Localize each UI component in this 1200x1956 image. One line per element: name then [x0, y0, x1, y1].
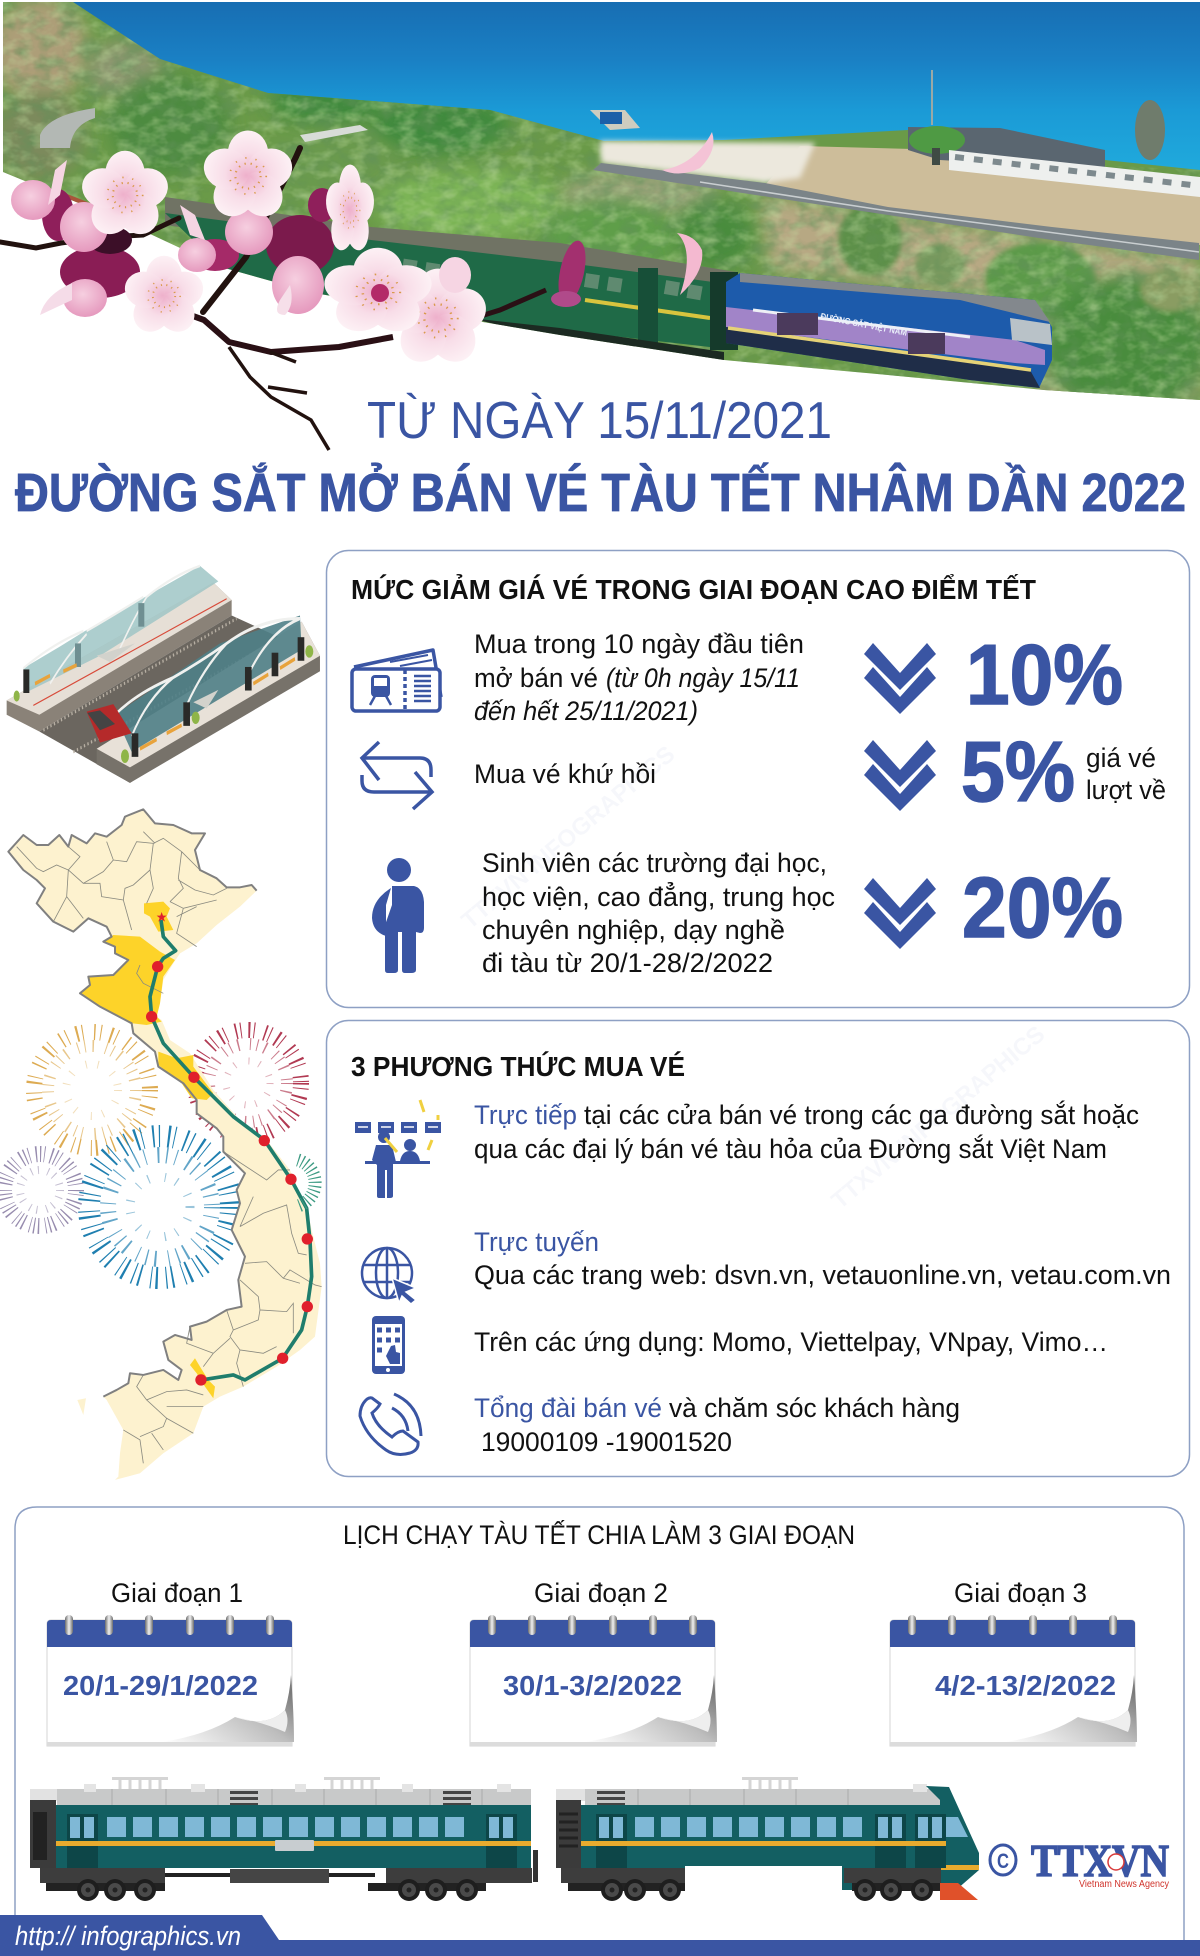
icon: smartphone: [372, 1316, 405, 1374]
heading: discount levels: MỨC GIẢM GIÁ VÉ TRONG GIAI ĐOẠN CAO ĐIỂM TẾT: [351, 573, 1036, 605]
heading: timetable: LỊCH CHẠY TÀU TẾT CHIA LÀM 3 GIAI ĐOẠN: [343, 1519, 855, 1550]
text: first ten days: Mua trong 10 ngày đầu tiên: [474, 629, 804, 659]
text: return fare: giá vé: [1086, 743, 1156, 773]
calendar: phase 2: 30/1-3/2/2022: [503, 1670, 682, 1701]
text: phase 3 label: Giai đoạn 3: [954, 1578, 1087, 1608]
text: buy in person: [474, 1099, 1139, 1164]
watermark: TTXVN INFOGRAPHICS: [827, 1021, 1050, 1215]
calendar: phase 1: 20/1-29/1/2022: [63, 1670, 258, 1701]
calendar: phase 3: 4/2-13/2/2022: [935, 1670, 1116, 1701]
icon: down chevrons 20 percent: [864, 878, 936, 949]
illustration: railway station: [7, 566, 320, 783]
text: students: đi tàu từ 20/1-28/2/2022: [482, 948, 773, 978]
text: buy in person: tại các cửa bán vé trong các ga đường sắt hoặc: [584, 1099, 1139, 1130]
icon: telephone: [360, 1394, 421, 1454]
text: return fare: lượt về: [1086, 775, 1166, 805]
text: hotline: 19000109 -19001520: [481, 1427, 732, 1457]
text: buy online: Trực tuyến: [474, 1227, 599, 1257]
text: students: học viện, cao đẳng, trung học: [482, 880, 835, 912]
heading: ways to buy: 3 PHƯƠNG THỨC MUA VÉ: [351, 1051, 685, 1082]
illustration: fireworks red: [195, 1030, 301, 1136]
text: return tickets: Mua vé khứ hồi: [474, 759, 656, 789]
text: buy online: [474, 1227, 1171, 1290]
text: students: [482, 848, 835, 978]
icon: tickets: [352, 650, 441, 711]
text: buy on apps: Trên các ứng dụng: Momo, Viettelpay, VNpay, Vimo…: [474, 1327, 1108, 1357]
text: first ten days: [474, 629, 804, 726]
text: buy in person: Trực tiếp: [474, 1100, 577, 1130]
icon: return arrows: [362, 742, 432, 809]
panel: discount levels: [326, 550, 1190, 1008]
panel: ways to buy: [326, 1020, 1190, 1476]
logo: TTXVN: [990, 1835, 1169, 1890]
number: 20 percent: 20%: [962, 861, 1123, 956]
calendar: phase 1: [47, 1615, 294, 1746]
text: hotline: Tổng đài bán vé: [474, 1393, 662, 1423]
text: locomotive lettering: ĐƯỜNG SẮT VIỆT NAM: [820, 310, 908, 338]
calendar: phase 2: [470, 1615, 717, 1746]
text: phase 1 label: Giai đoạn 1: [111, 1578, 243, 1608]
illustration: fireworks gold: [34, 1032, 150, 1148]
icon: down chevrons 10 percent: [864, 643, 936, 714]
illustration: train carriage: [30, 1777, 538, 1901]
number: 5 percent: 5%: [961, 725, 1075, 820]
illustration: fireworks blue: [89, 1136, 231, 1278]
text: buy online: Qua các trang web: dsvn.vn, vetauonline.vn, vetau.com.vn: [474, 1260, 1171, 1290]
illustration: fireworks purple: [4, 1154, 76, 1226]
watermark: TTXVN INFOGRAPHICS: [457, 741, 680, 935]
text: hotline: [474, 1393, 960, 1457]
icon: ticket counter: [355, 1100, 441, 1198]
text: phase 2 label: Giai đoạn 2: [534, 1578, 668, 1608]
text: buy in person: qua các đại lý bán vé tàu hỏa của Đường sắt Việt Nam: [474, 1133, 1107, 1164]
illustration: peach blossom branch: [0, 130, 714, 450]
number: 10 percent: 10%: [966, 628, 1123, 723]
text: hotline: và chăm sóc khách hàng: [669, 1393, 960, 1423]
text: first ten days: mở bán vé: [474, 663, 598, 693]
text: first ten days: (từ 0h ngày 15/11: [606, 663, 800, 693]
text: students: Sinh viên các trường đại học,: [482, 848, 827, 878]
icon: down chevrons 5 percent: [864, 740, 936, 811]
footer bar: [0, 1915, 1200, 1956]
text: website: http:// infographics.vn: [15, 1921, 241, 1951]
illustration: locomotive: [556, 1777, 979, 1901]
icon: student: [372, 858, 424, 973]
logo: TTXVN: Vietnam News Agency: [1079, 1879, 1169, 1890]
logo: TTXVN: TTXVN: [1031, 1835, 1169, 1886]
heading: date: TỪ NGÀY 15/11/2021: [367, 392, 832, 450]
panel: header photo of train by the sea: [0, 0, 1200, 415]
text: students: chuyên nghiệp, dạy nghề: [482, 915, 785, 945]
calendar: phase 3: [890, 1615, 1137, 1746]
illustration: fireworks green: [298, 1160, 315, 1206]
map: Vietnam with railway line: [8, 809, 322, 1480]
text: return fare: [1086, 743, 1166, 805]
logo: TTXVN: C: [997, 1850, 1009, 1873]
icon: globe with cursor: [362, 1248, 416, 1304]
panel: timetable: [15, 1507, 1184, 1940]
text: first ten days: đến hết 25/11/2021): [474, 696, 698, 726]
